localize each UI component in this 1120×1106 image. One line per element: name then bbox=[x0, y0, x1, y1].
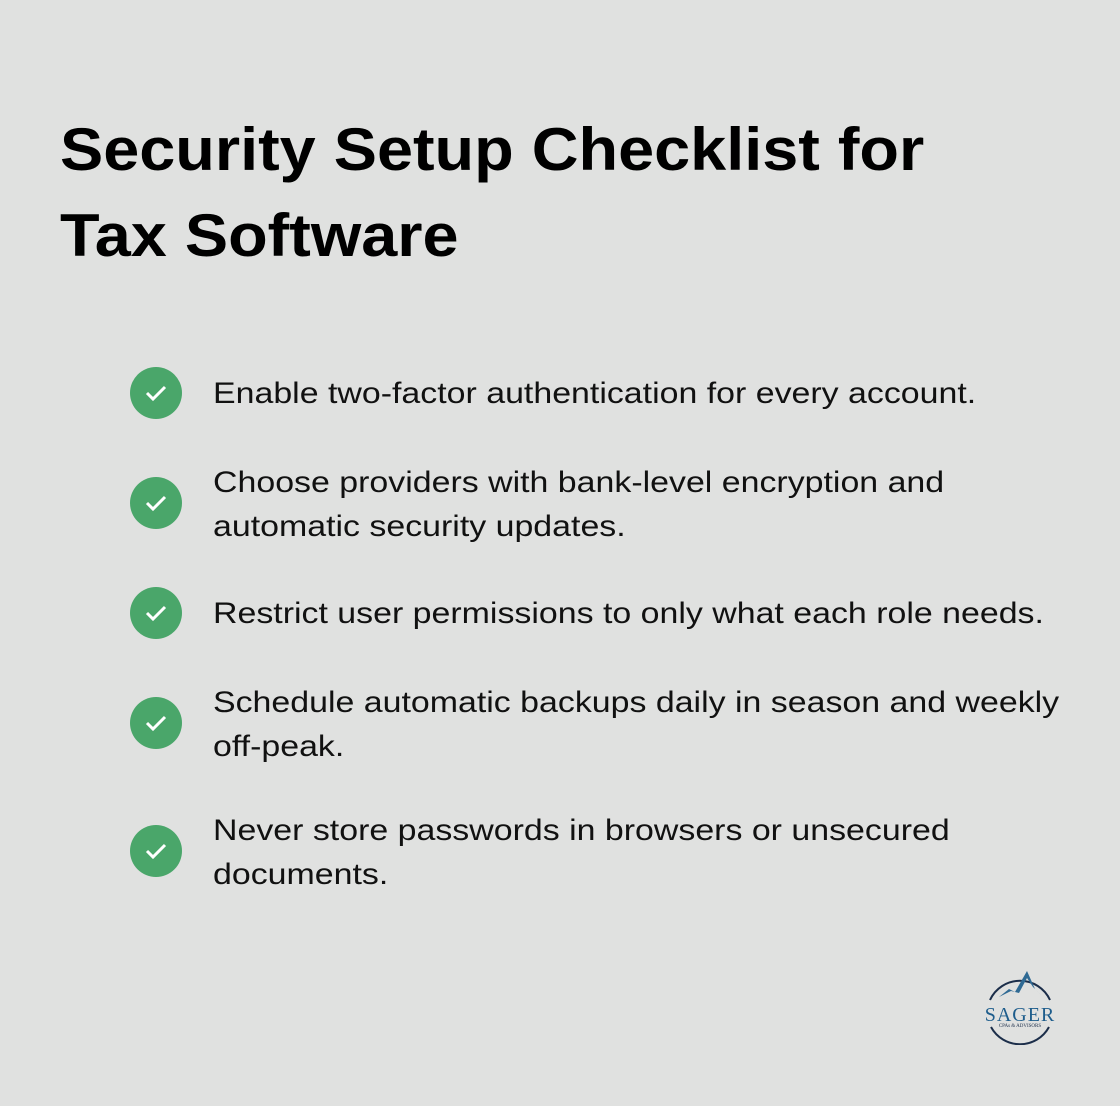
text: Never store passwords in browsers or unsecured bbox=[213, 814, 950, 847]
item 1 bbox=[130, 367, 976, 419]
text: Schedule automatic backups daily in season and weekly bbox=[213, 686, 1059, 719]
item 2 bbox=[130, 466, 944, 543]
item 3 bbox=[130, 587, 1044, 639]
icon: check bbox=[130, 587, 182, 639]
logo: SAGER bbox=[985, 1004, 1055, 1026]
text bbox=[213, 466, 944, 543]
icon: check bbox=[130, 367, 182, 419]
text bbox=[213, 814, 950, 891]
text: Enable two-factor authentication for every account. bbox=[213, 377, 976, 410]
text: Restrict user permissions to only what each role needs. bbox=[213, 597, 1044, 630]
item 5 bbox=[130, 814, 950, 891]
icon: check bbox=[130, 477, 182, 529]
logo bbox=[985, 971, 1055, 1045]
logo: CPAs & ADVISORS bbox=[999, 1024, 1041, 1029]
title: Tax Software bbox=[60, 202, 459, 269]
text: automatic security updates. bbox=[213, 510, 626, 543]
text bbox=[213, 686, 1059, 763]
title: Security Setup Checklist for bbox=[60, 116, 924, 183]
title bbox=[60, 116, 924, 269]
text: Choose providers with bank-level encryption and bbox=[213, 466, 944, 499]
text: documents. bbox=[213, 858, 388, 891]
text: off-peak. bbox=[213, 730, 344, 763]
icon: check bbox=[130, 825, 182, 877]
icon: check bbox=[130, 697, 182, 749]
item 4 bbox=[130, 686, 1059, 763]
